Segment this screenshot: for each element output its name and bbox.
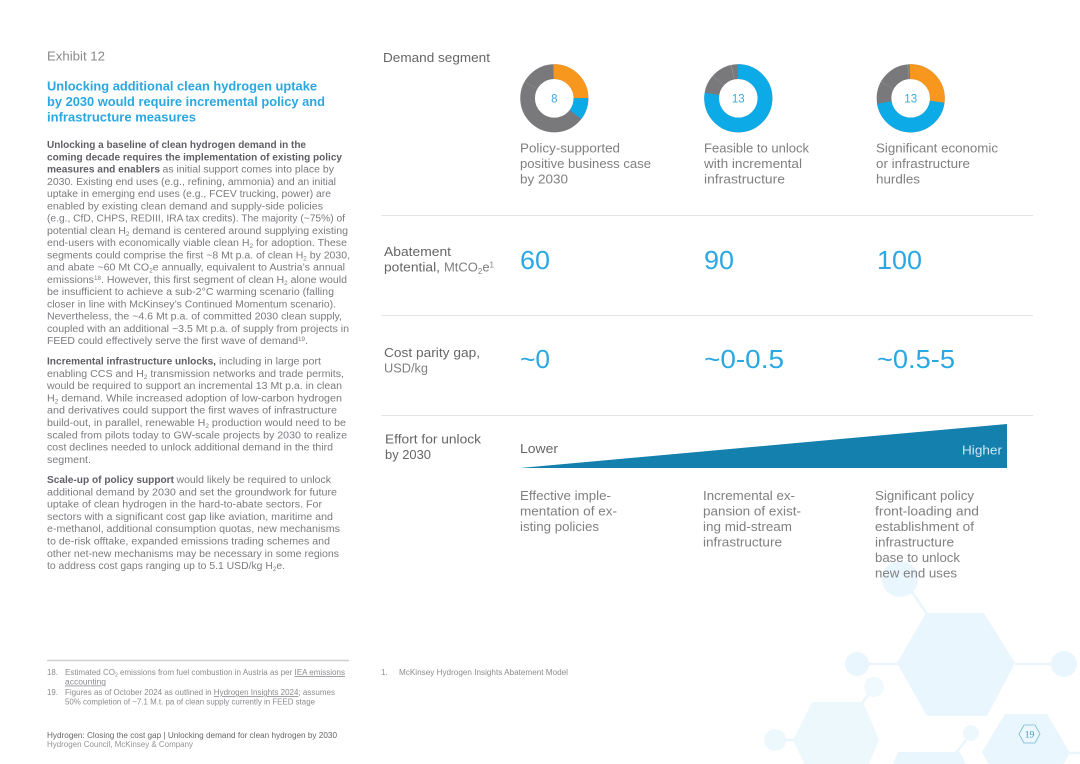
effort wedge chart: Lower [520, 441, 559, 456]
footnotes left: emissions from fuel combustion in Austria as per [118, 668, 295, 677]
effort description: column 3: new end uses [875, 566, 957, 580]
effort wedge chart: Higher [962, 442, 1003, 458]
text block: incremental infrastructure paragraph: including in large port [219, 356, 321, 368]
footer source: Hydrogen Council, McKinsey & Company [47, 740, 193, 749]
row label: effort for unlock [385, 432, 482, 462]
text block: baseline demand paragraph: 2 [249, 244, 254, 250]
value: abatement 60: 60 [520, 245, 550, 275]
footnotes left: Estimated CO [65, 668, 115, 677]
value: abatement 90: 90 [704, 245, 734, 275]
text block: scale-up of policy support paragraph: Scale-up of policy support [47, 475, 175, 486]
text block: incremental infrastructure paragraph: cost declines needed to unlock additional demand in the third [47, 443, 333, 454]
footnotes left: IEA emissions [295, 668, 345, 677]
text block: scale-up of policy support paragraph: other net-new mechanisms may be necessary in some regions [47, 549, 339, 560]
text block: scale-up of policy support paragraph [47, 475, 340, 573]
text block: incremental infrastructure paragraph: scaled from pilots today to GW-scale projects by 2030 to realize [47, 430, 347, 441]
effort description: column 2: Incremental ex- [703, 488, 795, 503]
effort description: column 1: Effective imple- [520, 488, 611, 503]
footnotes left: 2 [115, 672, 118, 678]
text block: incremental infrastructure paragraph: 2 [144, 375, 148, 381]
row label: effort for unlock: by 2030 [385, 447, 431, 462]
text block: incremental infrastructure paragraph: transmission networks and trade permits, [147, 369, 344, 380]
title: by 2030 would require incremental policy and [47, 94, 325, 109]
segment label: policy-supported: by 2030 [520, 172, 568, 186]
text block: scale-up of policy support paragraph: 2 [273, 567, 277, 573]
text block: baseline demand paragraph: . However, this first segment of clean H [101, 275, 284, 286]
donut chart: feasible to unlock, 13: 13 [732, 94, 745, 106]
text block: baseline demand paragraph: end-users with economically viable clean H [47, 238, 238, 249]
effort description: column 3: base to unlock [875, 550, 960, 565]
row label: effort for unlock: Effort for unlock [385, 432, 482, 446]
effort description: column 1: mentation of ex- [520, 504, 617, 518]
donut chart: policy-supported, 8: 8 [551, 94, 558, 106]
text block: incremental infrastructure paragraph: and derivatives could support the first waves of infrastructure [47, 406, 337, 417]
text block: incremental infrastructure paragraph: production would need to be [209, 418, 346, 429]
text block: baseline demand paragraph: 18 [94, 276, 102, 282]
segment label: significant hurdles: hurdles [876, 172, 921, 186]
text block: scale-up of policy support paragraph: e. [276, 561, 285, 572]
text block: baseline demand paragraph: Nevertheless, the ~4.6 Mt p.a. of committed 2030 clean supply, [47, 312, 342, 322]
segment label: significant hurdles: or infrastructure [876, 156, 970, 171]
text block: scale-up of policy support paragraph: uptake of clean hydrogen in the hard-to-abate sectors. For [47, 500, 323, 511]
value: cost gap ~0-0.5: ~0-0.5 [704, 344, 784, 374]
row label: cost parity gap: USD/kg [384, 360, 428, 376]
effort description: column 1 [520, 488, 617, 534]
row label: cost parity gap [384, 345, 480, 376]
segment label: policy-supported [520, 140, 651, 186]
text block: baseline demand paragraph: coupled with an additional ~3.5 Mt p.a. of supply from projects in [47, 324, 349, 335]
page number badge: 19 [1025, 730, 1034, 740]
text block: incremental infrastructure paragraph: build-out, in parallel, renewable H [47, 418, 195, 429]
text block: baseline demand paragraph: 2030. Existing end uses (e.g., refining, ammonia) and an initial [47, 177, 336, 188]
text block: baseline demand paragraph: be insufficient to achieve a sub-2°C warming scenario (falling [47, 287, 334, 298]
segment label: feasible to unlock: with incremental [703, 156, 802, 171]
segment label: feasible to unlock: Feasible to unlock [704, 140, 810, 156]
segment label: feasible to unlock [703, 140, 810, 186]
title: infrastructure measures [47, 110, 196, 124]
text block: baseline demand paragraph: coming decade requires the implementation of existing policy [47, 152, 342, 163]
value: cost gap ~0: ~0 [520, 344, 550, 374]
text block: baseline demand paragraph: closer in line with McKinsey’s Continued Momentum scenario). [47, 299, 336, 310]
effort wedge chart [520, 424, 1007, 468]
row label: abatement potential: 2 [478, 267, 483, 276]
footer source: Hydrogen: Closing the cost gap | Unlocking demand for clean hydrogen by 2030 [47, 731, 338, 740]
text block: scale-up of policy support paragraph: e-methanol, additional consumption quotas, new mechanisms [47, 524, 340, 535]
row label: abatement potential: potential, [384, 260, 440, 274]
text block: baseline demand paragraph: 2 [149, 268, 153, 274]
text block: baseline demand paragraph: demand is centered around supplying existing [129, 226, 348, 237]
heading: demand segment: Demand segment [383, 50, 490, 65]
text block: baseline demand paragraph: 2 [126, 232, 130, 238]
segment label: policy-supported: positive business case [520, 156, 651, 171]
footnote right: 1. [381, 668, 388, 677]
text block: scale-up of policy support paragraph: would likely be required to unlock [175, 475, 332, 486]
segment label: feasible to unlock: infrastructure [704, 172, 785, 186]
text block: baseline demand paragraph: 2 [303, 256, 308, 262]
text block: incremental infrastructure paragraph: H [47, 393, 54, 404]
text block: baseline demand paragraph: enabled by existing clean demand and supply-side policies [47, 201, 323, 212]
text block: baseline demand paragraph: e annually, equivalent to Austria’s annual [153, 262, 345, 274]
footnotes left: Figures as of October 2024 as outlined in Hydrogen Insights 2024; assumes [65, 688, 335, 697]
donut chart: policy-supported, 8 [528, 72, 581, 125]
effort description: column 1: isting policies [520, 519, 599, 534]
row label: abatement potential: 1 [490, 260, 495, 270]
page number badge [1019, 725, 1040, 743]
text block: scale-up of policy support paragraph: sectors with a significant cost gap like aviation, maritime and [47, 512, 333, 523]
footnotes left [47, 668, 345, 706]
footer source [47, 731, 338, 749]
effort description: column 2 [703, 488, 801, 550]
title: Unlocking additional clean hydrogen uptake [47, 78, 317, 94]
text block: incremental infrastructure paragraph: segment. [47, 455, 91, 466]
row label: abatement potential: MtCO [444, 260, 478, 274]
donut chart: significant hurdles, 13: 13 [904, 94, 917, 106]
text block: baseline demand paragraph: and abate ~60 Mt CO [47, 262, 143, 274]
exhibit label: Exhibit 12 [47, 50, 105, 64]
effort description: column 3 [875, 488, 979, 580]
effort description: column 3: establishment of [875, 519, 974, 534]
text block: scale-up of policy support paragraph: additional demand by 2030 and set the groundwork for future [47, 487, 337, 498]
text block: incremental infrastructure paragraph [46, 356, 347, 466]
value: cost gap ~0.5-5: ~0.5-5 [877, 344, 955, 374]
text block: baseline demand paragraph: emissions [47, 275, 91, 286]
value: abatement 100: 100 [877, 245, 922, 275]
footnotes left: 50% completion of ~7.1 M.t. pa of clean supply currently in FEED stage [65, 698, 316, 706]
text block: incremental infrastructure paragraph: demand. While increased adoption of low-carbon hydrogen [58, 393, 342, 404]
text block: incremental infrastructure paragraph: Incremental infrastructure unlocks, [47, 356, 216, 368]
effort description: column 2: infrastructure [703, 534, 782, 550]
effort description: column 3: Significant policy [875, 488, 975, 503]
effort description: column 3: infrastructure [875, 534, 954, 550]
row label: abatement potential [384, 244, 495, 276]
effort description: column 3: front-loading and [875, 504, 979, 518]
donut chart: feasible to unlock, 13 [712, 72, 765, 125]
text block: baseline demand paragraph: (e.g., CfD, CHPS, REDIII, IRA tax credits). The majority (~75%) of [47, 214, 345, 224]
background hexagon pattern [764, 561, 1080, 764]
footnotes left: 19. [47, 688, 58, 697]
text block: baseline demand paragraph: as initial support comes into place by [162, 164, 334, 176]
donut chart: significant hurdles, 13 [884, 72, 937, 125]
text block: baseline demand paragraph: alone would [288, 275, 347, 286]
effort description: column 2: pansion of exist- [703, 504, 801, 518]
text block: baseline demand paragraph: 19 [298, 337, 306, 343]
text block: incremental infrastructure paragraph: enabling CCS and H [47, 369, 138, 380]
text block: baseline demand paragraph: FEED could effectively serve the first wave of demand [47, 336, 286, 347]
text block: incremental infrastructure paragraph: 2 [205, 424, 210, 430]
text block: incremental infrastructure paragraph: would be required to support an incremental 13 Mt p.a. in clean [46, 381, 342, 392]
text block: baseline demand paragraph: Unlocking a baseline of clean hydrogen demand in the [47, 140, 306, 151]
row label: abatement potential: Abatement [384, 244, 451, 259]
text block: baseline demand paragraph [47, 140, 350, 347]
text block: incremental infrastructure paragraph: 2 [55, 399, 59, 405]
row label: cost parity gap: Cost parity gap, [384, 345, 480, 360]
text block: baseline demand paragraph: potential clean H [47, 226, 122, 237]
segment label: significant hurdles: Significant economic [876, 140, 999, 156]
effort description: column 2: ing mid-stream [703, 519, 792, 534]
text block: baseline demand paragraph: 2 [284, 281, 288, 287]
text block: scale-up of policy support paragraph: to de-risk offtake, expanded emissions trading schemes and [47, 536, 330, 548]
text block: scale-up of policy support paragraph: to address cost gaps ranging up to 5.1 USD/kg H [47, 561, 264, 572]
segment label: significant hurdles [876, 140, 999, 186]
footnotes left: 18. [47, 668, 58, 677]
text block: baseline demand paragraph: segments could comprise the first ~8 Mt p.a. of clean H [47, 250, 291, 261]
text block: baseline demand paragraph: measures and enablers [47, 164, 160, 176]
text block: baseline demand paragraph: uptake in emerging end uses (e.g., FCEV trucking, power) are [47, 189, 331, 200]
footnotes left: accounting [65, 678, 106, 686]
title [47, 78, 325, 124]
text block: baseline demand paragraph: . [305, 336, 308, 347]
segment label: policy-supported: Policy-supported [520, 140, 620, 156]
row label: abatement potential: e [482, 260, 490, 274]
text block: baseline demand paragraph: by 2030, [307, 250, 350, 261]
footnote right: McKinsey Hydrogen Insights Abatement Model [399, 668, 568, 677]
text block: baseline demand paragraph: for adoption. These [253, 238, 347, 249]
